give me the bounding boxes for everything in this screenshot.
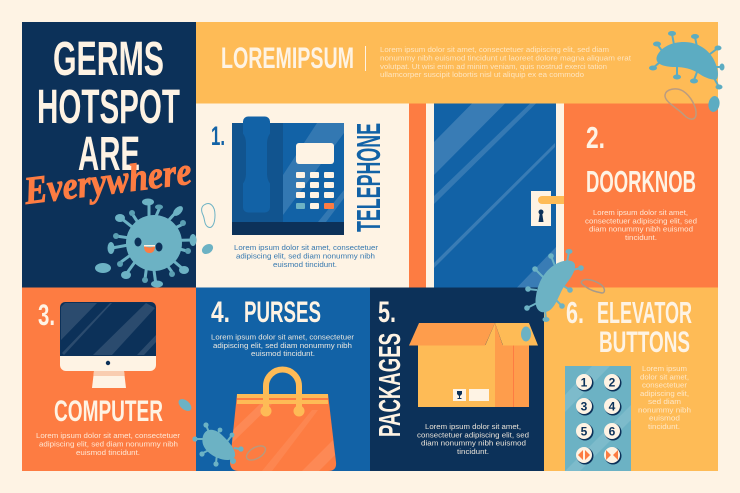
elevator number: 6. [566, 295, 584, 330]
purses heading: PURSES [244, 296, 321, 329]
germ: header virus [649, 31, 724, 119]
computer text: adipiscing elit, sed diam nonummy nibh [39, 442, 178, 448]
germ: door virus [524, 249, 604, 322]
blob outline [581, 280, 604, 293]
icon: telephone [232, 116, 344, 235]
icon: elevator button panel: 1 [581, 376, 588, 390]
icon: purse [230, 370, 336, 471]
elevator text: dolor sit amet, [640, 374, 689, 382]
telephone number: 1. [211, 121, 225, 151]
elevator text: tincidunt. [648, 424, 680, 431]
packages text: Lorem ipsum dolor sit amet, [425, 424, 521, 431]
purses number: 4. [211, 296, 230, 329]
panel: purses [196, 288, 370, 471]
header paragraph: Lorem ipsum dolor sit amet, consectetuer adipiscing elit, sed diam [380, 47, 609, 54]
icon: door handle [531, 191, 570, 226]
title heading: HOTSPOT [37, 81, 180, 134]
blob [176, 397, 194, 413]
purses text: euismod tincidunt. [251, 351, 315, 358]
packages text: diam nonummy nibh euismod [421, 440, 526, 448]
doorknob number: 2. [586, 120, 605, 155]
icon: package box [409, 323, 538, 407]
telephone text: adipiscing elit, sed diam nonummy nibh [236, 254, 375, 260]
germ: blobs beside mascot [200, 204, 215, 256]
packages text [417, 424, 529, 456]
title script word: Everywhere [21, 150, 194, 213]
panel: telephone [196, 104, 409, 288]
title heading [37, 33, 180, 181]
elevator text: adipiscing elit, [640, 391, 689, 398]
blob outline [244, 443, 268, 463]
purses text: adipiscing elit, sed diam nonummy nibh [213, 343, 352, 350]
panel: header [196, 22, 718, 104]
title heading: GERMS [53, 33, 164, 86]
icon: elevator button panel: 4 [609, 400, 616, 414]
header heading: LOREMIPSUM [221, 42, 354, 75]
icon: computer [60, 302, 156, 388]
header divider [365, 46, 366, 71]
doorknob text: diam nonummy nibh euismod [589, 226, 693, 234]
telephone text: euismod tincidunt. [273, 262, 337, 269]
telephone text [234, 245, 379, 269]
germ: purse virus [176, 397, 268, 467]
panel: packages [370, 288, 544, 471]
doorknob text: Lorem ipsum dolor sit amet, [593, 210, 688, 217]
telephone text: Lorem ipsum dolor sit amet, consectetuer [234, 245, 379, 252]
header paragraph: ullamcorper suscipit lobortis nisl ut aliquip ex ea commodo [380, 72, 584, 79]
icon: elevator button panel [565, 366, 631, 471]
panel: doorknob [564, 104, 718, 288]
icon: elevator button panel: 3 [581, 400, 588, 414]
computer text [36, 433, 181, 457]
panel: title [21, 22, 196, 288]
header paragraph: nonummy nibh euismod tincidunt ut laoreet dolore magna aliquam erat [380, 56, 631, 62]
elevator text [638, 366, 691, 431]
icon: elevator button panel: 5 [581, 424, 588, 438]
panel: computer [22, 288, 196, 471]
packages text: tincidunt. [457, 449, 489, 456]
packages number: 5. [378, 296, 396, 329]
icon: elevator button panel: 2 [609, 376, 616, 390]
computer text: euismod tincidunt. [76, 450, 140, 457]
blob outline [665, 89, 696, 119]
doorknob text [585, 210, 697, 242]
germ: mascot virus [95, 198, 196, 288]
doorknob text: consectetuer adipiscing elit, sed [585, 218, 697, 226]
icon: elevator button panel: 6 [609, 424, 616, 438]
panel: elevator buttons: BUTTONS [599, 326, 690, 359]
computer text: Lorem ipsum dolor sit amet, consectetuer [36, 433, 181, 440]
purses text: Lorem ipsum dolor sit amet, consectetuer [211, 334, 355, 342]
telephone heading: TELEPHONE [350, 123, 387, 232]
elevator text: consectetuer [642, 382, 688, 390]
purses text [211, 334, 355, 358]
title heading: ARE [78, 128, 140, 181]
computer heading: COMPUTER [54, 395, 163, 428]
header paragraph [380, 47, 631, 79]
elevator text: sed diam [648, 399, 681, 406]
packages heading: PACKAGES [372, 333, 407, 437]
panel: door [409, 104, 570, 288]
elevator text: nonummy nibh [638, 408, 691, 414]
panel: elevator buttons [544, 288, 718, 471]
doorknob text: tincidunt. [625, 235, 657, 242]
computer number: 3. [38, 299, 55, 332]
elevator text: Lorem ipsum [642, 366, 687, 373]
packages text: consectetuer adipiscing elit, sed [417, 432, 529, 440]
elevator text: euismod [649, 416, 680, 422]
header paragraph: volutpat. Ut wisi enim ad minim veniam, quis nostrud exerci tation [380, 64, 607, 71]
